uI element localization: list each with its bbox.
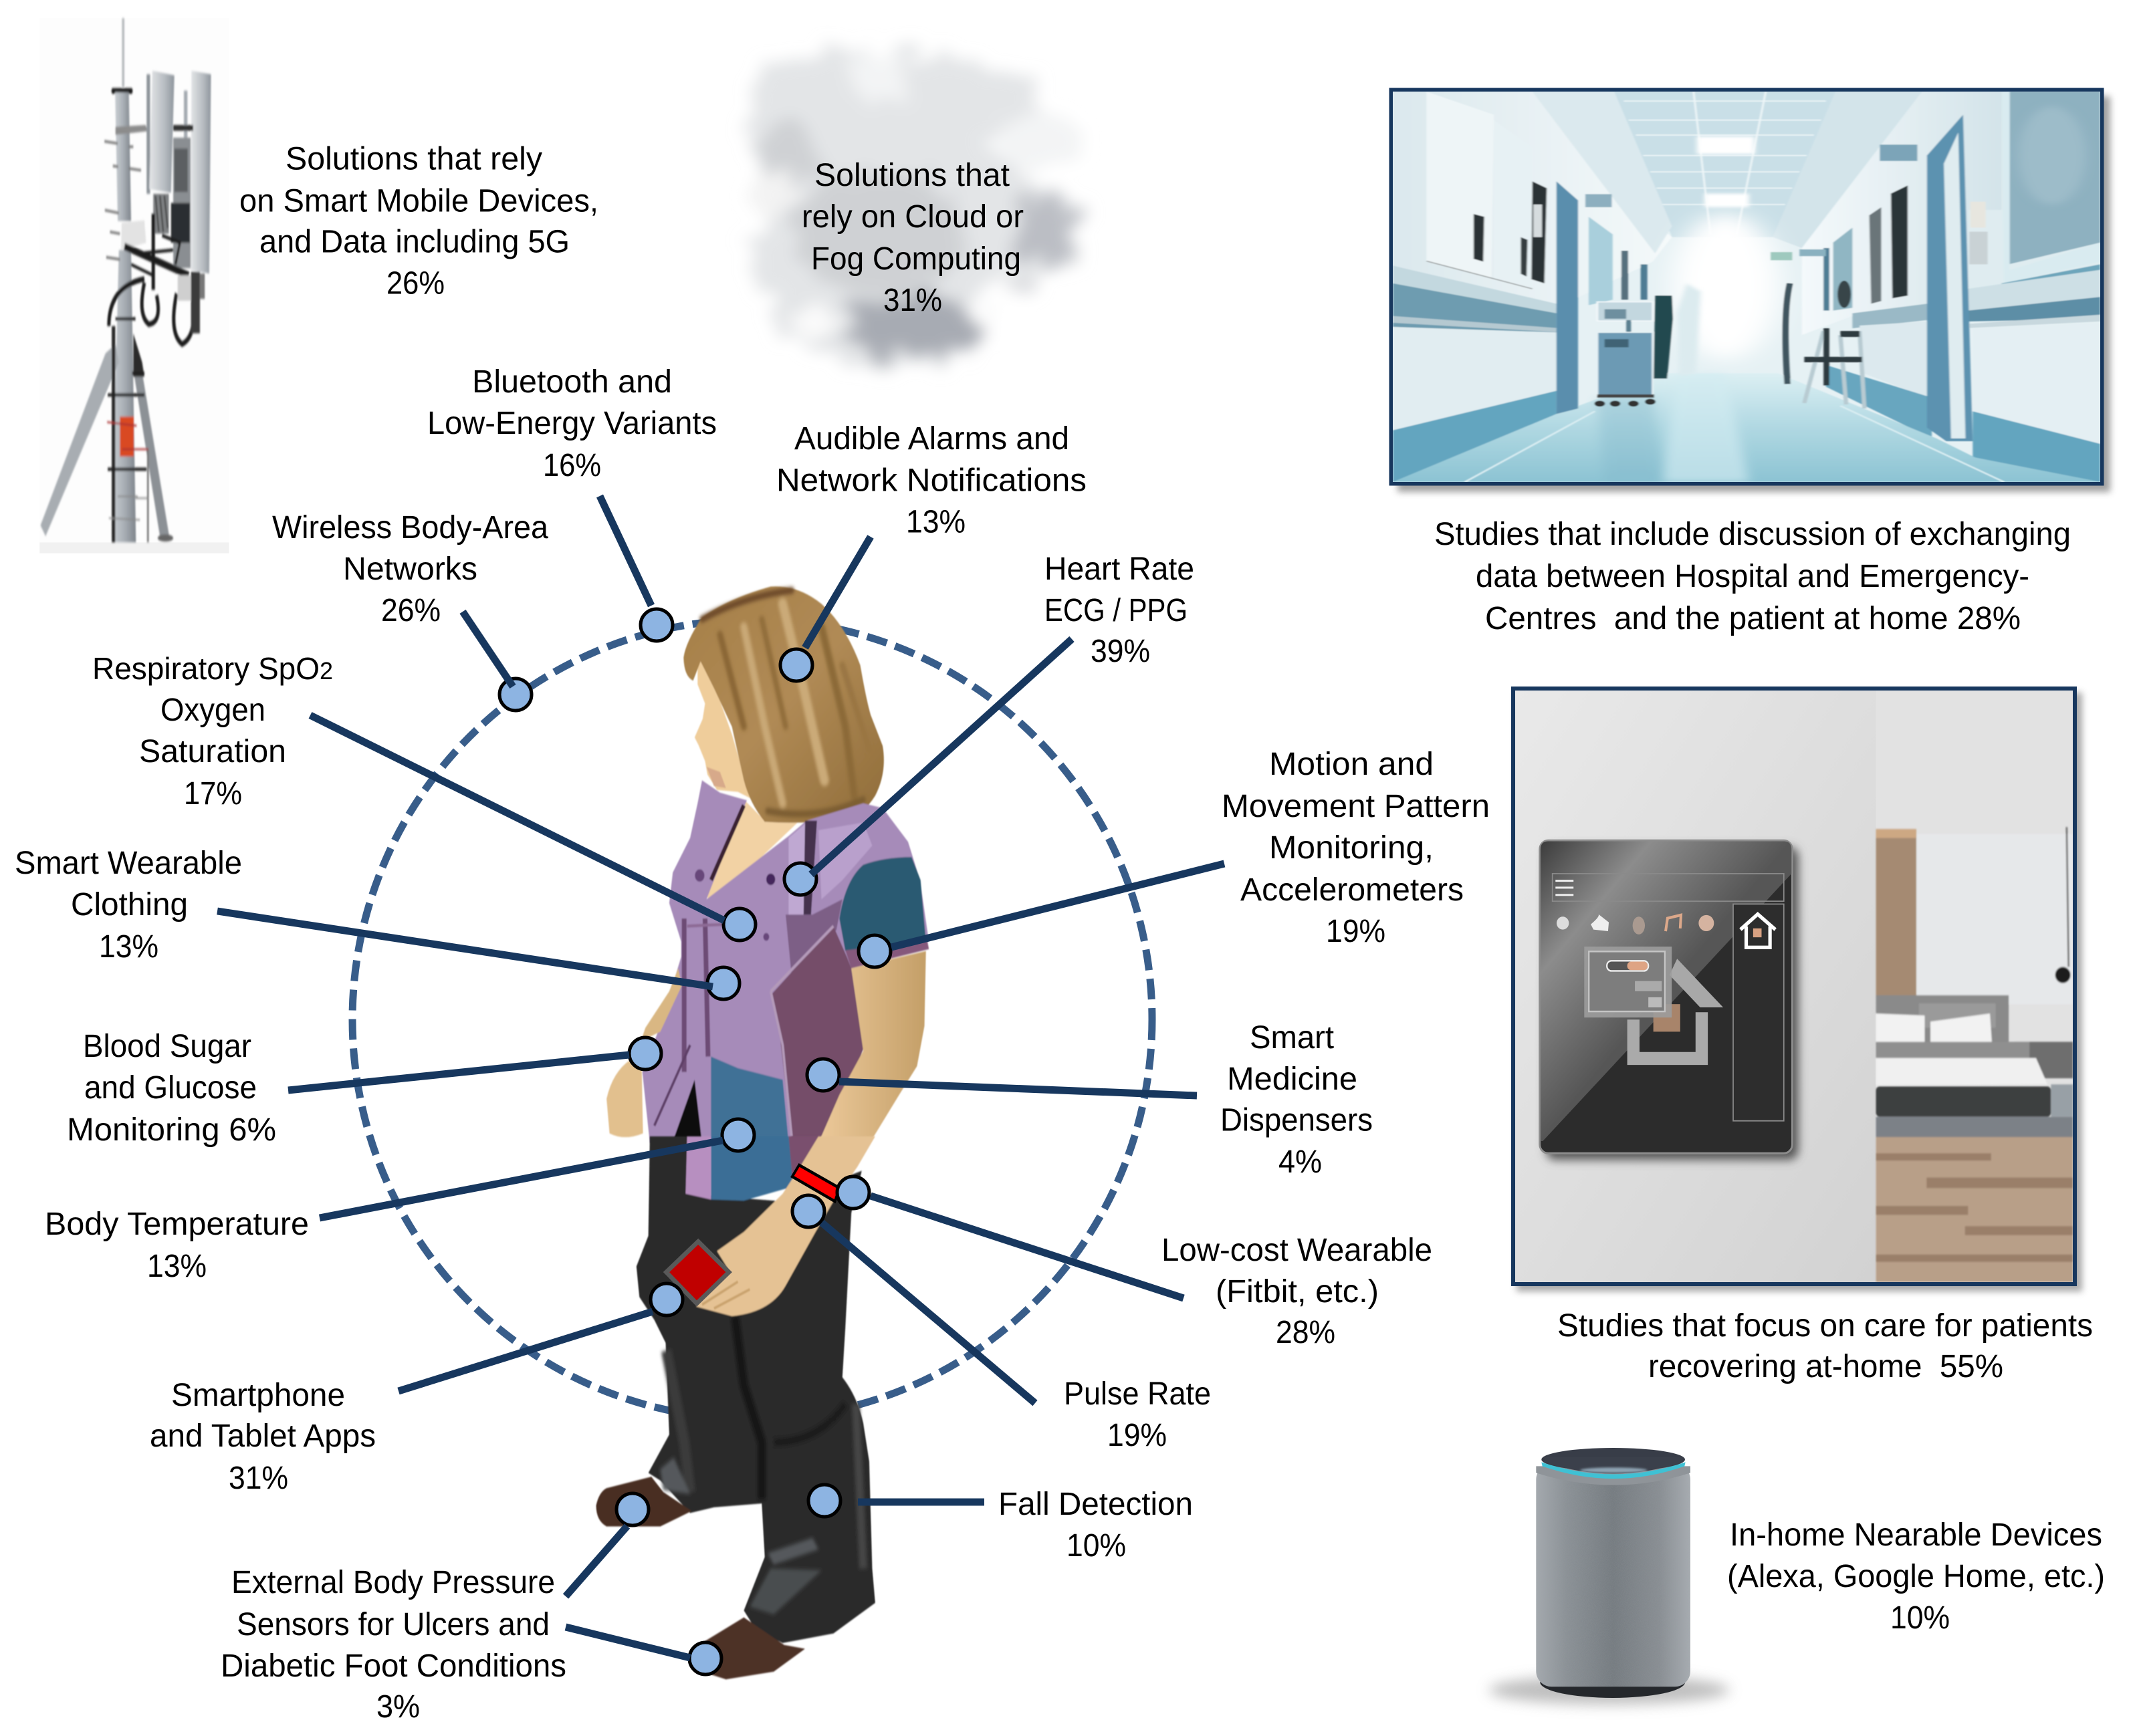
text: heart rate: 39% [1091,634,1150,669]
caption: care at home: Studies that focus on care for patients [1557,1308,2093,1344]
text: pulse rate: Pulse Rate [1064,1376,1211,1412]
text: body temperature [45,1207,309,1284]
text: blood sugar: and Glucose [84,1070,257,1106]
text: smart medicine dispensers: Smart [1250,1020,1334,1056]
caption: hospital data exchange: data between Hospital and Emergency- [1476,559,2029,594]
text: smart wearable clothing [15,846,242,965]
caption: in-home nearable devices: In-home Nearable Devices [1730,1517,2102,1553]
image: smart home wall panel [1513,689,2082,1291]
text: blood sugar: Blood Sugar [83,1029,251,1064]
text: pulse rate: 19% [1107,1418,1167,1453]
text: respiratory: Respiratory SpO2 [92,651,333,686]
text: bluetooth [427,364,717,483]
text: audible alarms: Network Notifications [776,463,1087,499]
text: external body pressure: External Body Pressure [231,1565,555,1600]
icon: red wristband [792,1165,839,1201]
caption: in-home nearable devices: 10% [1890,1600,1950,1636]
text: cloud or fog computing: Fog Computing [811,241,1021,277]
text: pulse rate [1064,1376,1211,1453]
text: blood sugar: Monitoring 6% [67,1112,276,1148]
text: low-cost wearable: Low-cost Wearable [1161,1233,1432,1268]
text: body temperature: Body Temperature [45,1207,309,1242]
caption: hospital data exchange [1434,517,2071,636]
text: motion and movement: Movement Pattern [1222,789,1490,824]
text: bluetooth: Low-Energy Variants [427,406,717,441]
image: cloud [744,51,1088,369]
text: smart wearable clothing: Smart Wearable [15,846,242,881]
text: smart medicine dispensers: 4% [1278,1144,1322,1180]
text: smart mobile devices: 26% [386,266,445,301]
text: audible alarms: 13% [906,504,966,540]
text: smart mobile devices: Solutions that rely [286,142,542,176]
sensor points [499,609,891,1675]
icon: red smartphone [666,1241,729,1304]
figure: standing woman [596,586,929,1679]
text: wireless body-area networks: Wireless Body-Area [272,510,548,545]
text: external body pressure: Diabetic Foot Conditions [221,1648,566,1684]
text: respiratory [92,651,333,812]
text: cloud or fog computing: 31% [883,283,942,318]
text: respiratory: 17% [184,776,242,812]
text: bluetooth: Bluetooth and [472,364,672,400]
text: wireless body-area networks [272,510,548,628]
text: wireless body-area networks: Networks [343,551,477,587]
caption: care at home: recovering at-home 55% [1648,1349,2003,1384]
text: smart medicine dispensers [1220,1020,1373,1180]
text: smartphone and tablet apps: 31% [229,1461,288,1496]
text: fall detection [998,1487,1193,1564]
text: low-cost wearable: (Fitbit, etc.) [1216,1274,1379,1310]
text: motion and movement: Motion and [1269,747,1434,782]
text: wireless body-area networks: 26% [381,593,441,628]
caption: in-home nearable devices [1727,1517,2105,1636]
dashed sensor ring [352,620,1152,1419]
text: heart rate [1044,551,1194,669]
text: smart medicine dispensers: Medicine [1227,1062,1357,1097]
text: external body pressure: 3% [376,1689,420,1725]
text: body temperature: 13% [147,1249,207,1284]
text: smartphone and tablet apps [150,1378,376,1496]
caption: hospital data exchange: Centres and the patient at home 28% [1485,601,2021,636]
text: external body pressure [221,1565,566,1725]
image: hospital corridor [1391,90,2110,492]
text: motion and movement [1222,747,1490,949]
text: motion and movement: Accelerometers [1240,872,1464,908]
image: smart speaker [1489,1448,1730,1705]
text: low-cost wearable: 28% [1276,1315,1335,1350]
text: low-cost wearable [1161,1233,1432,1350]
image: 5G cell tower [39,18,229,553]
text: audible alarms: Audible Alarms and [794,421,1069,457]
text: cloud or fog computing: Solutions that [814,158,1010,193]
caption: hospital data exchange: Studies that include discussion of exchanging [1434,517,2071,552]
text: fall detection: Fall Detection [998,1487,1193,1522]
text: smart wearable clothing: 13% [99,929,158,965]
text: heart rate: Heart Rate [1044,551,1194,587]
text: respiratory: Saturation [139,734,286,769]
text: smartphone and tablet apps: Smartphone [171,1378,345,1413]
text: external body pressure: Sensors for Ulcers and [237,1607,550,1642]
text: smart mobile devices [239,142,598,301]
text: smart mobile devices: and Data including 5G [259,225,570,259]
text: smart mobile devices: on Smart Mobile Devices, [239,183,598,219]
caption: care at home [1557,1308,2093,1384]
text: cloud or fog computing [802,158,1024,318]
text: motion and movement: 19% [1326,914,1385,949]
text: smartphone and tablet apps: and Tablet Apps [150,1418,376,1454]
text: blood sugar [67,1029,276,1148]
text: respiratory: Oxygen [160,693,265,728]
text: smart medicine dispensers: Dispensers [1220,1103,1373,1138]
text: motion and movement: Monitoring, [1269,830,1434,866]
text: smart wearable clothing: Clothing [71,887,188,922]
text: cloud or fog computing: rely on Cloud or [802,199,1024,235]
text: fall detection: 10% [1066,1528,1126,1564]
text: bluetooth: 16% [543,448,601,483]
caption: in-home nearable devices: (Alexa, Google Home, etc.) [1727,1559,2105,1594]
leader lines [217,496,1224,1658]
text: audible alarms [776,421,1087,540]
text: heart rate: ECG / PPG [1044,593,1188,628]
